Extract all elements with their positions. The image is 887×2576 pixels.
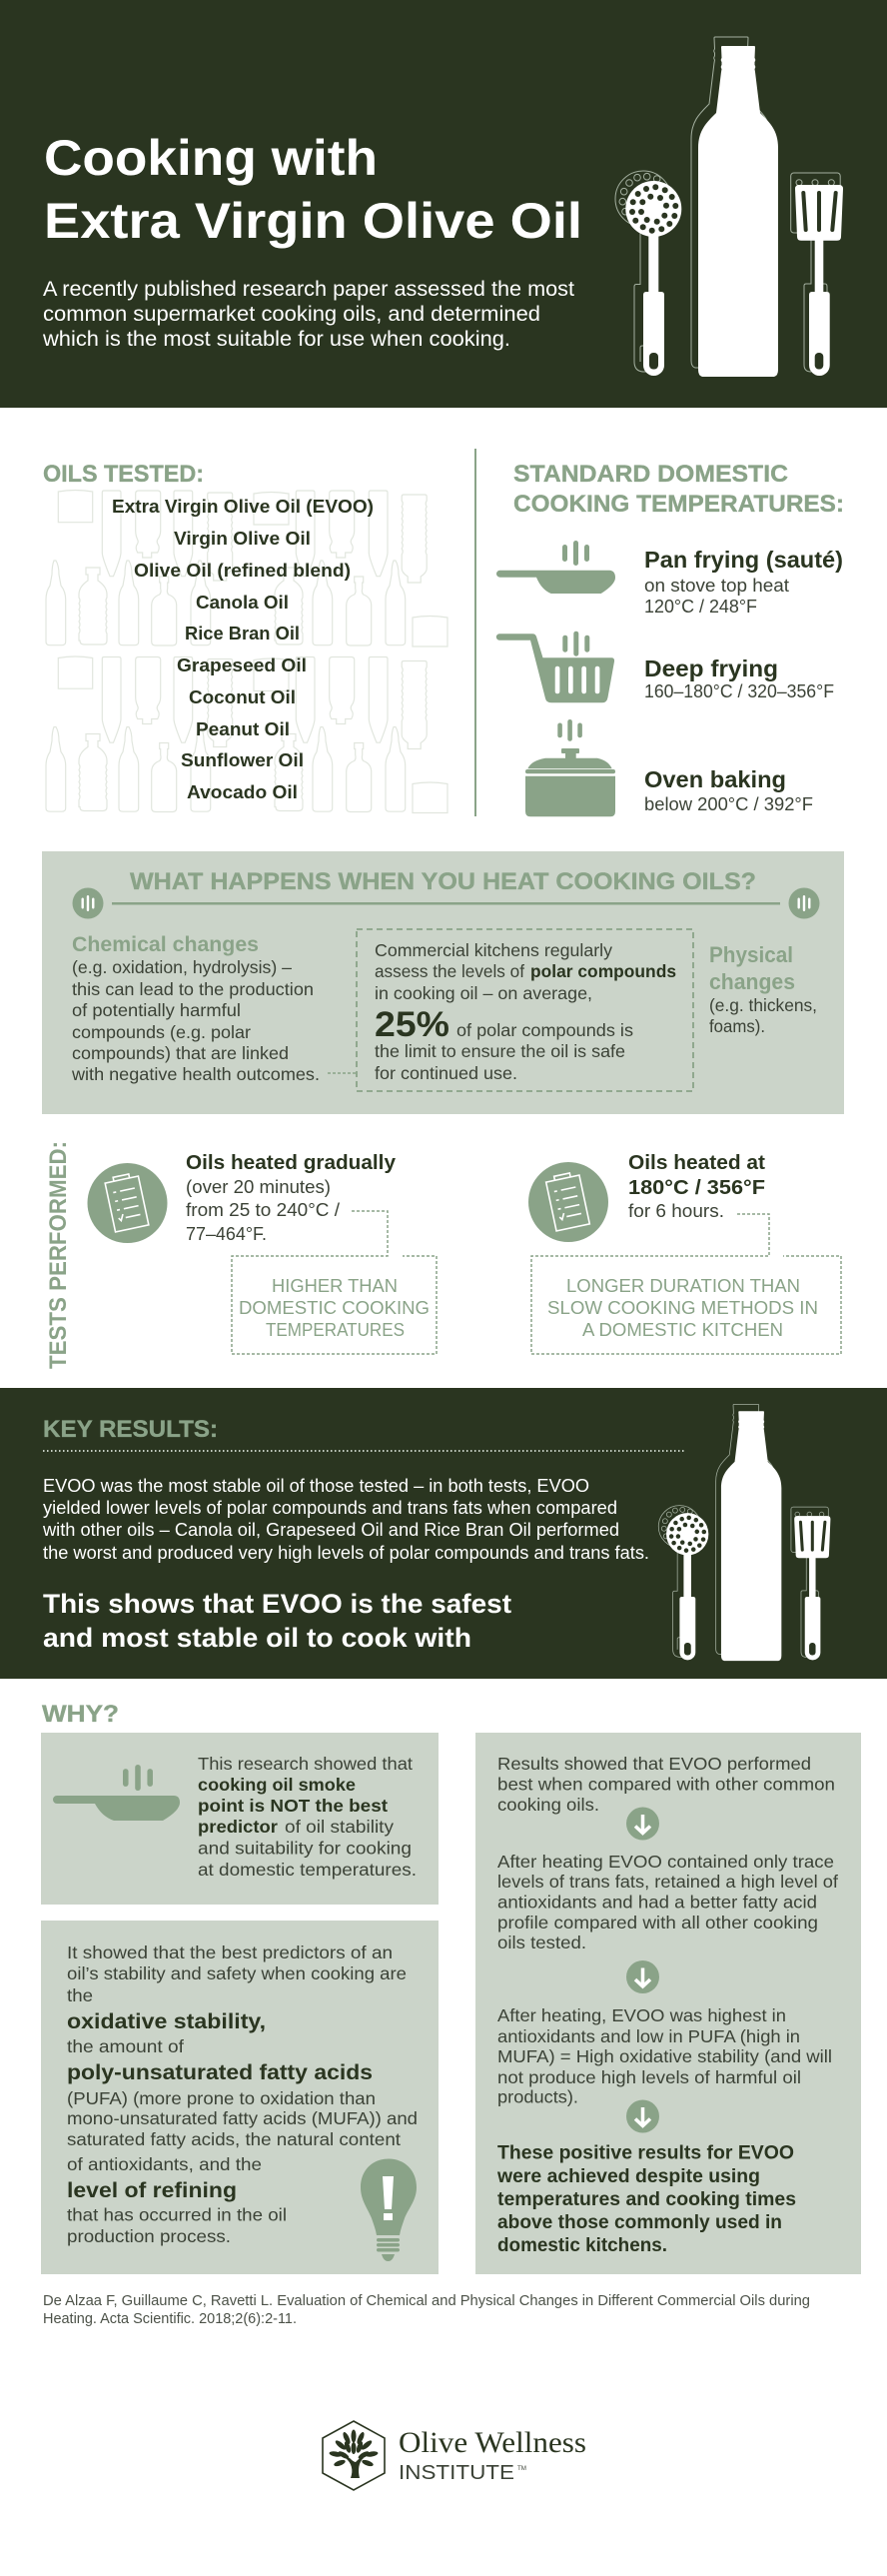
- physical changes text: foams).: [709, 1016, 765, 1036]
- title: Extra Virgin Olive Oil: [44, 193, 582, 249]
- heading: oils tested: OILS TESTED:: [43, 461, 204, 488]
- results paragraph 2: [497, 1852, 838, 1952]
- icon: frying pan: [496, 541, 615, 594]
- oil bottles background: [46, 490, 447, 813]
- best predictors text: oil’s stability and safety when cooking are: [67, 1963, 407, 1983]
- callout: higher than domestic: [232, 1211, 437, 1354]
- list of oils: Peanut Oil: [196, 719, 290, 739]
- heading: key results: KEY RESULTS:: [43, 1416, 218, 1443]
- pan frying text: [644, 547, 843, 617]
- list of oils: Canola Oil: [196, 593, 289, 613]
- callout: polar compounds: assess the levels of: [375, 961, 524, 981]
- heading: cooking temperatures: COOKING TEMPERATURES:: [513, 491, 844, 518]
- panel: smoke point: [41, 1733, 439, 1905]
- pan frying text: on stove top heat: [644, 576, 789, 596]
- list of oils: Grapeseed Oil: [177, 655, 307, 675]
- logo wordmark: Olive Wellness: [399, 2426, 586, 2459]
- best predictors text: the amount of: [67, 2036, 184, 2056]
- results paragraph 2: antioxidants and had a better fatty acid: [497, 1893, 817, 1913]
- heading: cooking temperatures: STANDARD DOMESTIC: [513, 461, 788, 488]
- results conclusion: These positive results for EVOO: [497, 2142, 794, 2164]
- logo: Olive Wellness Institute: [323, 2421, 586, 2490]
- test 1 text: (over 20 minutes): [186, 1177, 331, 1197]
- best predictors text: the: [67, 1985, 93, 2005]
- arrow 3: [626, 2100, 659, 2132]
- key results text: EVOO was the most stable oil of those tested – in both tests, EVOO: [43, 1476, 589, 1496]
- arrow 2: [626, 1960, 659, 1993]
- callout: polar compounds: of polar compounds is: [456, 1020, 633, 1040]
- smoke point text: of oil stability: [285, 1817, 394, 1837]
- logo wordmark: [399, 2426, 586, 2484]
- best predictors text: saturated fatty acids, the natural content: [67, 2129, 401, 2149]
- oven baking text: below 200°C / 392°F: [644, 794, 813, 814]
- key results text: [42, 1476, 649, 1563]
- callout: polar compounds: [328, 929, 693, 1091]
- icon: hexagon tree: [323, 2421, 385, 2490]
- callout: polar compounds: Commercial kitchens regularly: [375, 940, 612, 960]
- chemical changes text: this can lead to the production: [72, 979, 314, 999]
- arrow 1: [626, 1807, 659, 1841]
- smoke point text: predictor: [198, 1817, 278, 1837]
- icon: pot: [525, 719, 615, 816]
- results paragraph 1: Results showed that EVOO performed: [497, 1754, 811, 1774]
- best predictors text: oxidative stability,: [67, 2010, 266, 2033]
- intro text: A recently published research paper assessed the most: [43, 277, 574, 301]
- key results text: with other oils – Canola oil, Grapeseed Oil and Rice Bran Oil performed: [42, 1520, 619, 1540]
- best predictors text: It showed that the best predictors of an: [67, 1942, 393, 1962]
- results paragraph 1: [497, 1754, 835, 1815]
- results paragraph 3: products).: [497, 2086, 578, 2106]
- citation: De Alzaa F, Guillaume C, Ravetti L. Evaluation of Chemical and Physical Changes in Different Commercial Oils during: [43, 2293, 810, 2309]
- results paragraph 2: oils tested.: [497, 1932, 586, 1952]
- intro text: which is the most suitable for use when cooking.: [42, 327, 510, 351]
- test 1 text: [186, 1151, 397, 1244]
- callout: polar compounds: polar compounds: [530, 961, 676, 981]
- results paragraph 2: After heating EVOO contained only trace: [497, 1852, 834, 1872]
- results paragraph 3: [497, 2005, 832, 2106]
- conclusion text: and most stable oil to cook with: [43, 1623, 471, 1653]
- smoke point text: point is NOT the best: [198, 1796, 388, 1816]
- results paragraph 3: MUFA) = High oxidative stability (and will: [497, 2046, 832, 2066]
- panel: best predictors: [41, 1921, 439, 2274]
- best predictors text: of antioxidants, and the: [67, 2154, 262, 2174]
- title: [44, 130, 582, 249]
- pan frying text: 120°C / 248°F: [644, 597, 757, 617]
- citation: Heating. Acta Scientific. 2018;2(6):2-11.: [43, 2311, 297, 2327]
- best predictors text: mono-unsaturated fatty acids (MUFA)) and: [67, 2108, 418, 2128]
- icon: steam badge right: [789, 887, 819, 919]
- chemical changes text: with negative health outcomes.: [71, 1064, 320, 1084]
- heading: why: WHY?: [42, 1701, 119, 1728]
- heading: what happens: WHAT HAPPENS WHEN YOU HEAT COOKING OILS?: [130, 868, 756, 895]
- icon: clipboard 1: [88, 1163, 168, 1243]
- citation: [43, 2293, 810, 2327]
- panel: oils tested: [43, 461, 447, 813]
- pan frying text: Pan frying (sauté): [644, 547, 843, 573]
- physical changes text: changes: [709, 969, 795, 994]
- panel: what happens when you heat cooking oils: [42, 851, 844, 1114]
- physical changes text: Physical: [709, 942, 793, 967]
- key results text: the worst and produced very high levels of polar compounds and trans fats.: [43, 1543, 649, 1563]
- icon: deep fry basket: [496, 632, 614, 702]
- panel: tests performed: [45, 1141, 841, 1369]
- test 2 text: Oils heated at: [628, 1151, 765, 1174]
- best predictors text: poly-unsaturated fatty acids: [67, 2061, 373, 2084]
- logo wordmark: INSTITUTE: [399, 2462, 514, 2484]
- oven baking text: [644, 766, 813, 814]
- callout: higher than domestic: DOMESTIC COOKING: [239, 1297, 430, 1318]
- test 1 text: from 25 to 240°C /: [186, 1200, 340, 1220]
- results paragraph 3: antioxidants and low in PUFA (high in: [497, 2026, 800, 2046]
- smoke point text: and suitability for cooking: [198, 1839, 412, 1859]
- key results text: yielded lower levels of polar compounds and trans fats when compared: [43, 1498, 617, 1518]
- chemical changes text: [71, 933, 320, 1084]
- best predictors text: [67, 1942, 418, 2246]
- callout: longer duration: [531, 1214, 841, 1354]
- callout: higher than domestic: HIGHER THAN: [272, 1275, 398, 1296]
- list of oils: Coconut Oil: [189, 687, 296, 707]
- conclusion text: This shows that EVOO is the safest: [43, 1589, 511, 1619]
- results paragraph 3: not produce high levels of harmful oil: [497, 2067, 801, 2087]
- deep frying text: 160–180°C / 320–356°F: [644, 681, 834, 701]
- smoke point text: at domestic temperatures.: [198, 1860, 417, 1880]
- results paragraph 2: levels of trans fats, retained a high level of: [497, 1872, 838, 1892]
- chemical changes text: Chemical changes: [72, 933, 259, 956]
- list of oils: Virgin Olive Oil: [174, 529, 311, 549]
- callout: higher than domestic: TEMPERATURES: [266, 1319, 405, 1340]
- icon: bottle, skimmer and spatula small: [658, 1404, 830, 1661]
- test 2 text: 180°C / 356°F: [628, 1176, 765, 1199]
- intro text: [42, 277, 574, 351]
- chemical changes text: of potentially harmful: [72, 1000, 241, 1020]
- callout: longer duration: LONGER DURATION THAN: [566, 1275, 800, 1296]
- panel: key results: [0, 1388, 887, 1679]
- best predictors text: level of refining: [67, 2179, 237, 2202]
- chemical changes text: compounds (e.g. polar: [72, 1022, 251, 1042]
- list of oils: Extra Virgin Olive Oil (EVOO): [112, 497, 374, 517]
- best predictors text: (PUFA) (more prone to oxidation than: [67, 2088, 376, 2108]
- results conclusion: domestic kitchens.: [497, 2235, 667, 2256]
- physical changes text: [709, 942, 817, 1036]
- heading: tests performed: TESTS PERFORMED:: [45, 1141, 72, 1369]
- results paragraph 1: cooking oils.: [497, 1795, 599, 1815]
- results paragraph 1: best when compared with other common: [497, 1775, 835, 1795]
- panel: results: [475, 1733, 861, 2274]
- list of oils: Avocado Oil: [187, 782, 298, 802]
- list of oils: Rice Bran Oil: [185, 624, 300, 644]
- icon: clipboard 2: [528, 1162, 608, 1242]
- best predictors text: production process.: [67, 2226, 231, 2246]
- results paragraph 2: profile compared with all other cooking: [497, 1913, 818, 1932]
- icon: steam badge left: [72, 887, 104, 919]
- results conclusion: [496, 2142, 796, 2256]
- callout: longer duration: SLOW COOKING METHODS IN: [547, 1297, 818, 1318]
- callout: polar compounds: 25%: [375, 1005, 449, 1044]
- intro text: common supermarket cooking oils, and determined: [43, 302, 540, 326]
- panel: cooking temperatures: [496, 461, 844, 816]
- smoke point text: cooking oil smoke: [198, 1775, 356, 1795]
- conclusion text: [43, 1589, 511, 1653]
- test 2 text: for 6 hours.: [628, 1201, 724, 1221]
- results paragraph 3: After heating, EVOO was highest in: [497, 2005, 786, 2025]
- callout: polar compounds: in cooking oil – on average,: [375, 983, 592, 1003]
- best predictors text: that has occurred in the oil: [67, 2204, 287, 2224]
- list of oils: Olive Oil (refined blend): [134, 561, 351, 581]
- title: Cooking with: [44, 130, 378, 186]
- physical changes text: (e.g. thickens,: [709, 995, 817, 1015]
- logo wordmark: TM: [517, 2466, 526, 2472]
- chemical changes text: (e.g. oxidation, hydrolysis) –: [72, 957, 292, 977]
- callout: polar compounds: for continued use.: [375, 1063, 517, 1083]
- oven baking text: Oven baking: [644, 766, 786, 792]
- deep frying text: [644, 655, 834, 701]
- results conclusion: temperatures and cooking times: [497, 2189, 796, 2210]
- callout: longer duration: A DOMESTIC KITCHEN: [582, 1319, 783, 1340]
- test 1 text: 77–464°F.: [186, 1224, 267, 1244]
- chemical changes text: compounds) that are linked: [72, 1043, 289, 1063]
- list of oils: [112, 497, 374, 802]
- icon: light bulb: [361, 2158, 417, 2261]
- deep frying text: Deep frying: [644, 655, 778, 681]
- test 1 text: Oils heated gradually: [186, 1151, 397, 1174]
- results conclusion: were achieved despite using: [496, 2166, 760, 2187]
- smoke point text: [198, 1754, 417, 1880]
- icon: bottle, skimmer and spatula: [615, 37, 843, 377]
- callout: polar compounds: the limit to ensure the oil is safe: [375, 1041, 625, 1061]
- results conclusion: above those commonly used in: [497, 2212, 782, 2233]
- smoke point text: This research showed that: [198, 1754, 413, 1774]
- panel: header background: [0, 0, 887, 408]
- icon: pan: [53, 1765, 180, 1821]
- heading: cooking temperatures: [513, 461, 844, 518]
- list of oils: Sunflower Oil: [181, 750, 304, 770]
- test 2 text: [628, 1151, 765, 1221]
